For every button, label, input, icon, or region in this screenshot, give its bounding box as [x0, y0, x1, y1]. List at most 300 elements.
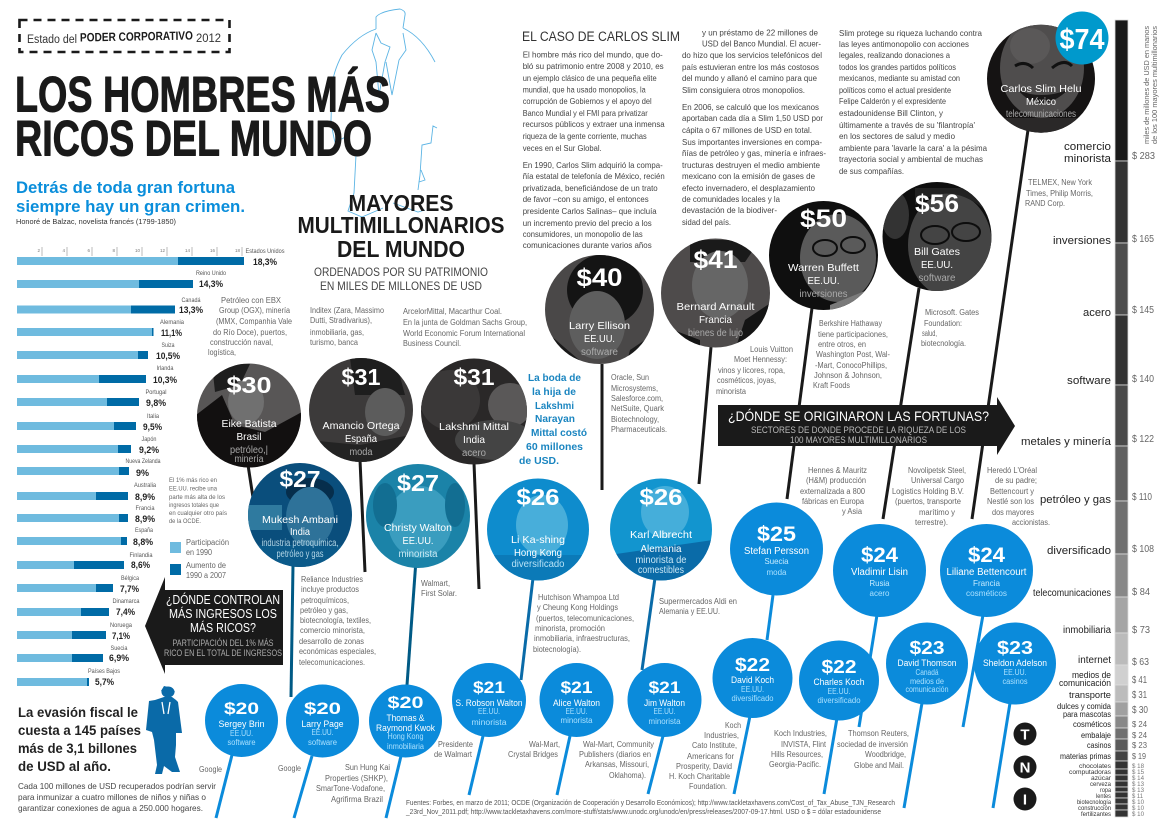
bar chart: share of top 1% in total income by country: Irlanda — [156, 366, 174, 372]
billionaire: Christy Walton: Christy Walton — [384, 522, 452, 534]
billionaire: Carlos Slim: Carlos Slim Helu — [1000, 83, 1082, 95]
billionaire: Lakshmi Mittal: $31 — [454, 364, 495, 390]
holdings: Arnault — [716, 345, 793, 396]
holdings: Kwok: Properties (SHKP), — [325, 774, 388, 783]
holdings: Charles Koch: INVISTA, Flint — [781, 740, 827, 749]
holdings: Gates — [921, 308, 979, 348]
quote: siempre hay un gran crimen. — [16, 197, 245, 216]
text block: the Carlos Slim case: legales, realizando donaciones a — [839, 50, 950, 60]
sector labels: diversificado — [1047, 545, 1111, 557]
holdings: Page: Google — [278, 764, 301, 773]
holdings: Jim Walton: Wal-Mart, Community — [583, 740, 654, 749]
holdings: Lisin: Universal Cargo — [911, 476, 965, 485]
sector values: $ 110 — [1132, 492, 1152, 503]
holdings: Persson: (H&M) producción — [806, 476, 866, 485]
holdings: Batista: Petróleo con EBX — [221, 296, 282, 305]
holdings: Mittal: ArcelorMittal, Macarthur Coal. — [403, 307, 502, 316]
billionaire: Alice Walton: EE.UU. — [566, 707, 588, 716]
billionaire: David Thomson: $23 — [910, 638, 944, 658]
quote — [16, 178, 245, 226]
holdings: Kwok — [316, 763, 390, 804]
bar chart: share of top 1% in total income by country: 13,3% — [179, 305, 203, 316]
billionaire: Sheldon Adelson: EE.UU. — [1004, 668, 1026, 677]
billionaire: Mukesh Ambani: India — [290, 526, 310, 538]
logo: TNI: I — [1023, 792, 1027, 808]
text block: the Carlos Slim case: estadounidense Bill Clinton, y — [839, 108, 944, 118]
holdings: Brin: Google — [199, 765, 222, 774]
holdings: Robson Walton: Presidente — [438, 740, 474, 749]
bar chart: share of top 1% in total income by country: 9% — [136, 468, 150, 479]
title: LOS HOMBRES MÁS — [15, 66, 390, 122]
text block: the Carlos Slim case: trayectoria social y ambiental de muchas — [839, 154, 983, 164]
billionaire: Stefan Persson: $25 — [757, 523, 796, 546]
holdings: Bettencourt: dos mayores — [992, 508, 1034, 517]
billionaire: Larry Page: $20 — [304, 699, 341, 718]
billionaire: Larry Page: software — [308, 738, 338, 747]
sector labels: inversiones — [1053, 235, 1112, 247]
bar chart: share of top 1% in total income by country: Dinamarca — [112, 599, 140, 605]
small sector labels — [1069, 764, 1112, 818]
holdings: Buffett: Kraft Foods — [813, 381, 850, 390]
billionaire: Alice Walton — [508, 663, 614, 795]
holdings: Li Ka-shing — [533, 593, 634, 654]
arrow callout: who controls the most income: MÁS INGRESOS LOS — [169, 606, 277, 621]
billionaire: Sergey Brin: EE.UU. — [230, 729, 253, 738]
callout: Lakshmi Mittal wedding: La boda de — [528, 372, 581, 384]
billionaire: David Koch: EE.UU. — [741, 685, 764, 694]
billionaire: Eike Batista: Eike Batista — [222, 418, 277, 430]
holdings: Arnault: cosméticos, joyas, — [717, 376, 776, 385]
billionaire: Christy Walton — [365, 463, 471, 685]
sector labels — [1021, 141, 1112, 761]
legend: Aumento de — [186, 561, 227, 570]
text block: the Carlos Slim case: políticos como el actual presidente — [839, 85, 951, 95]
billionaire: Bernard Arnault: bienes de lujo — [688, 328, 743, 339]
text block: the Carlos Slim case: de comunidades locales y la — [682, 194, 780, 204]
sector labels: para mascotas — [1063, 710, 1111, 719]
billionaire: Charles Koch: diversificado — [818, 696, 861, 705]
billionaire: David Thomson — [837, 622, 968, 808]
billionaire: Vladimir Lisin — [833, 466, 966, 727]
text block: the Carlos Slim case: El hombre más rico del mundo, que do- — [523, 49, 663, 59]
illustration: outline of a man in a suit — [331, 9, 437, 217]
callout: Lakshmi Mittal wedding: Narayan — [535, 413, 575, 425]
bar chart: share of top 1% in total income by country: 5,7% — [95, 677, 114, 688]
sector values: $ 140 — [1132, 374, 1154, 385]
holdings: Bettencourt: Heredó L'Oréal — [987, 466, 1037, 475]
sector labels: telecomunicaciones — [1033, 588, 1111, 599]
holdings: Kwok: SmarTone-Vodafone, — [316, 784, 385, 793]
text block: the Carlos Slim case: en los sectores de salud y medio — [839, 131, 955, 141]
billionaire: Stefan Persson — [730, 466, 867, 640]
bar chart: share of top 1% in total income by country: Alemania — [160, 320, 185, 326]
text block: the Carlos Slim case: En 1990, Carlos Slim adquirió la compa- — [523, 160, 663, 170]
sector labels: software — [1067, 375, 1111, 387]
holdings: Ortega: Inditex (Zara, Massimo — [310, 306, 384, 315]
quote: Honoré de Balzac, novelista francés (1799-1850) — [16, 219, 176, 226]
billionaire: David Koch — [669, 638, 792, 794]
sector values: $ 23 — [1132, 740, 1147, 750]
sector labels: metales y minería — [1021, 436, 1112, 448]
callout: Lakshmi Mittal wedding: Mittal costó — [531, 427, 587, 439]
text block: the Carlos Slim case: mexicano con la emisión de gases de — [682, 171, 815, 181]
heading: mayores multimillonarios del mundo: ORDENADOS POR SU PATRIMONIO — [314, 265, 488, 279]
text block: the Carlos Slim case: ñías de petróleo y gas, minería e infraes- — [682, 148, 826, 158]
billionaire: Warren Buffett: EE.UU. — [808, 275, 840, 287]
billionaire: Karl Albrecht: minorista de — [636, 555, 687, 566]
sector labels: embalaje — [1081, 731, 1112, 740]
bar chart: share of top 1% in total income by country: 10 — [135, 248, 140, 253]
holdings: Li Ka-shing: y Cheung Kong Holdings — [537, 603, 618, 612]
holdings: Batista: do Río Doce), puertos, — [213, 328, 287, 337]
billionaire: Karl Albrecht: comestibles — [638, 565, 684, 576]
logo: TNI: T — [1020, 726, 1030, 744]
bar chart: share of top 1% in total income by country: 8,6% — [131, 560, 150, 571]
holdings: Gates: Microsoft. Gates — [925, 308, 979, 317]
billionaire: Bill Gates: EE.UU. — [921, 259, 953, 271]
small sector values: $ 18 — [1132, 764, 1145, 770]
header tag: Estado del Poder Corporativo 2012: Estado del — [27, 34, 77, 46]
bar chart: share of top 1% in total income by country: Países Bajos — [88, 669, 120, 675]
billionaire: Vladimir Lisin: Rusia — [870, 578, 890, 588]
billionaire: Stefan Persson: moda — [766, 568, 787, 577]
text block: the Carlos Slim case: Sus importantes inversiones en compa- — [682, 137, 822, 147]
holdings: Ellison: Pharmaceuticals. — [611, 425, 667, 434]
sector labels: comunicación — [1059, 678, 1111, 688]
sector values: $ 24 — [1132, 730, 1147, 740]
holdings: Gates: salud, — [922, 329, 937, 338]
billionaire: Thomas and Raymond Kwok: Hong Kong — [388, 732, 424, 741]
holdings: Buffett: Washington Post, Wal- — [816, 350, 890, 359]
arrow callout: where fortunes originated: 100 MAYORES MULTIMILLONARIOS — [790, 435, 927, 446]
billionaire: Vladimir Lisin: Vladimir Lisin — [851, 567, 908, 578]
holdings: Buffett: Berkshire Hathaway — [819, 319, 882, 328]
bar chart: share of top 1% in total income by country: 8,8% — [133, 537, 154, 548]
heading: mayores multimillonarios del mundo: EN MILES DE MILLONES DE USD — [320, 279, 482, 293]
holdings: Bettencourt: Bettencourt y — [990, 487, 1034, 496]
billionaire: Bill Gates: software — [918, 273, 956, 284]
heading: mayores multimillonarios del mundo: DEL MUNDO — [337, 236, 465, 262]
holdings: Thomson — [837, 729, 909, 770]
bar chart: share of top 1% in total income by country: Australia — [134, 483, 157, 489]
billionaire: Liliane Bettencourt — [940, 466, 1050, 727]
bar chart: share of top 1% in total income by country: Finlandia — [130, 553, 153, 559]
holdings: Alice Walton: Wal-Mart, — [529, 740, 560, 749]
bar chart: share of top 1% in total income by country: 9,5% — [143, 422, 162, 433]
bar chart: share of top 1% in total income by country: Bélgica — [121, 576, 140, 582]
text block: the Carlos Slim case: corrupción de Gobiernos y el apoyo del — [523, 96, 652, 106]
text block: the Carlos Slim case: últimamente a través de su 'filantropía' — [839, 120, 975, 130]
billionaire: S. Robson Walton: S. Robson Walton — [456, 698, 522, 708]
sector labels: materias primas — [1060, 752, 1111, 761]
billionaire: Carlos Slim: telecomunicaciones — [1006, 109, 1076, 120]
billionaire: Bernard Arnault: Bernard Arnault — [676, 301, 755, 313]
holdings: Mittal: World Economic Forum International — [403, 329, 525, 338]
holdings: Charles Koch: Hills Resources, — [771, 750, 823, 759]
holdings: Ambani: petroquímicos, — [301, 596, 349, 605]
billionaire: Amancio Ortega: moda — [350, 447, 373, 458]
holdings: Bettencourt: Nestlé son los — [987, 497, 1034, 506]
axis caption: miles de millones de USD en manos — [1142, 26, 1151, 144]
sector values: $ 283 — [1132, 151, 1155, 162]
bar chart: share of top 1% in total income by country: 7,7% — [120, 584, 139, 595]
billionaire: Karl Albrecht: Karl Albrecht — [630, 529, 692, 541]
billionaire: Bill Gates: Bill Gates — [914, 246, 960, 258]
amount badge: $74 — [1060, 24, 1104, 56]
billionaire: Sheldon Adelson: $23 — [997, 638, 1033, 658]
holdings: Kwok: Agrifirma Brazil — [331, 795, 383, 804]
holdings: David Koch: Prosperity, David — [676, 762, 732, 771]
text block: the Carlos Slim case: tructuras destruyen el medio ambiente — [682, 160, 820, 170]
billionaire: David Koch: David Koch — [731, 675, 774, 685]
holdings: Ortega: inmobiliaria, gas, — [310, 328, 364, 337]
sector labels: transporte — [1069, 690, 1111, 701]
callout: Lakshmi Mittal wedding: Lakshmi — [535, 400, 574, 412]
billionaire: S. Robson Walton: minorista — [472, 718, 507, 727]
billionaire: Karl Albrecht: $26 — [640, 484, 682, 510]
bar chart: share of top 1% in total income by country: Francia — [136, 506, 155, 512]
holdings: Ambani: incluye productos — [301, 585, 359, 594]
bar chart: share of top 1% in total income by country: 11,1% — [161, 328, 182, 339]
holdings: David Koch — [669, 721, 741, 791]
billionaire: Li Ka-shing: Hong Kong — [514, 547, 562, 559]
axis caption — [1142, 26, 1159, 144]
sector labels: petróleo y gas — [1040, 494, 1112, 506]
billionaire: Larry Ellison: $40 — [576, 264, 622, 292]
small sector values: $ 10 — [1132, 812, 1145, 818]
billionaire: Jim Walton — [579, 663, 702, 794]
text block: the Carlos Slim case: cápita o 67 millones de USD en total. — [682, 125, 812, 135]
billionaire: Christy Walton: EE.UU. — [402, 535, 434, 547]
text block: the Carlos Slim case: Slim consiguiera otros monopolios. — [682, 85, 805, 95]
holdings: Ambani: petróleo y gas, — [300, 606, 348, 615]
holdings: Thomson: Thomson Reuters, — [848, 729, 909, 738]
holdings: Slim: Times, Philip Morris, — [1026, 189, 1093, 198]
sector values: $ 63 — [1132, 657, 1149, 668]
billionaire: Amancio Ortega — [308, 306, 415, 572]
billionaire: David Thomson: medios de — [910, 677, 944, 686]
holdings: Albrecht: Supermercados Aldi en — [659, 597, 737, 606]
billionaire: Lakshmi Mittal: acero — [462, 448, 486, 459]
callout: Lakshmi Mittal wedding — [519, 372, 587, 467]
holdings: David Koch: Cato Institute, — [692, 741, 737, 750]
small sector values: $ 10 — [1132, 806, 1145, 812]
billionaire: Larry Ellison — [544, 254, 667, 490]
holdings: Ortega: turismo, banca — [310, 338, 359, 347]
billionaire: Mukesh Ambani: industria petroquímica, — [262, 538, 338, 549]
text block: tax evasion — [18, 705, 216, 813]
bar chart: share of top 1% in total income by country: Italia — [147, 414, 160, 420]
billionaire: Sergey Brin: $20 — [224, 699, 259, 718]
text block: the Carlos Slim case: presidente Carlos Salinas– que incluía — [523, 206, 657, 216]
billionaire: Li Ka-shing: diversificado — [512, 559, 565, 570]
holdings: Batista: Group (OGX), minería — [219, 306, 290, 315]
callout: Lakshmi Mittal wedding: de USD. — [519, 455, 559, 467]
holdings: Charles Koch: Koch Industries, — [774, 729, 827, 738]
billionaire: David Thomson: David Thomson — [898, 658, 956, 668]
heading: mayores multimillonarios del mundo: MULTIMILLONARIOS — [298, 212, 504, 238]
sector labels: internet — [1078, 655, 1111, 666]
note: top 1% in USA: en cualquier otro país — [169, 510, 228, 517]
billionaire: Alice Walton: minorista — [560, 716, 593, 725]
text block: tax evasion: cuesta a 145 países — [18, 723, 141, 738]
bar chart: share of top 1% in total income by country: Suecia — [110, 646, 128, 652]
holdings: Slim — [1025, 178, 1093, 208]
small sector values: $ 15 — [1132, 770, 1145, 776]
billionaire: Karl Albrecht — [609, 478, 737, 670]
bar chart: share of top 1% in total income by country: Nueva Zelanda — [126, 459, 161, 465]
text block: the Carlos Slim case: un ejemplo clásico de una pequeña elite — [523, 73, 657, 83]
billionaire: Bill Gates — [881, 181, 992, 519]
holdings: Lisin — [892, 466, 966, 527]
callout: Lakshmi Mittal wedding: la hija de — [532, 386, 576, 398]
holdings: Ellison: Oracle, Sun — [611, 373, 649, 382]
holdings: Bettencourt: accionistas. — [1012, 518, 1050, 527]
billionaire: Sheldon Adelson: casinos — [1002, 677, 1028, 686]
small sector labels: azúcar — [1091, 776, 1111, 782]
holdings: Ambani: comercio minorista, — [300, 626, 365, 635]
holdings: Alice Walton — [508, 740, 560, 759]
legend: en 1990 — [186, 548, 212, 557]
holdings: Mittal — [403, 307, 527, 348]
text block: the Carlos Slim case: devastación de la biodiver- — [682, 205, 777, 215]
text block: the Carlos Slim case: En 2006, se calculó que los mexicanos — [682, 102, 819, 112]
billionaire: Charles Koch: $22 — [822, 657, 856, 677]
text block: the Carlos Slim case: do hizo que los servicios telefónicos del — [682, 50, 822, 60]
holdings: Thomson: Globe and Mail. — [854, 761, 904, 770]
legend: Participación — [186, 538, 229, 547]
bar chart: share of top 1% in total income by country: Suiza — [162, 343, 175, 349]
small sector labels: fertilizantes — [1081, 812, 1111, 818]
holdings: Batista: logística, — [208, 348, 236, 357]
billionaire: Sheldon Adelson — [974, 622, 1056, 808]
arrow callout: where fortunes originated: SECTORES DE DONDE PROCEDE LA RIQUEZA DE LOS — [751, 425, 966, 436]
text block: the Carlos Slim case: aportaban cada día a Slim 1,50 USD por — [682, 113, 823, 123]
sector labels: minorista — [1064, 153, 1112, 165]
holdings: Slim: TELMEX, New York — [1028, 178, 1093, 187]
text block: tax evasion: garantizar conexiones de agua a 250.000 hogares. — [18, 803, 203, 813]
holdings: Jim Walton: Arkansas, Missouri, — [585, 760, 649, 769]
holdings: Ellison: NetSuite, Quark — [611, 404, 665, 413]
holdings: Kwok: Sun Hung Kai — [345, 763, 390, 772]
note: top 1% in USA: de la OCDE. — [169, 518, 201, 525]
bar chart: share of top 1% in total income by country: 6 — [87, 248, 90, 253]
holdings: Persson: fábricas en Europa — [802, 497, 865, 506]
holdings: Albrecht: Alemania y EE.UU. — [659, 607, 720, 616]
header tag: Estado del Poder Corporativo 2012: 2012 — [196, 33, 221, 45]
bar chart: share of top 1% in total income by country: Japón — [142, 437, 156, 443]
billionaire: Bernard Arnault: $41 — [694, 246, 738, 274]
logo: TNI — [1014, 722, 1036, 810]
billionaire: Larry Page — [278, 684, 359, 818]
text block: the Carlos Slim case: Slim protege su riqueza luchando contra — [839, 28, 982, 38]
billionaire: Mukesh Ambani: petróleo y gas — [276, 549, 324, 560]
text block: the Carlos Slim case: privatizada, beneficiándose de un trato — [523, 183, 658, 193]
bar chart: share of top 1% in total income by country: 9,2% — [139, 445, 160, 456]
billionaire: Li Ka-shing: Li Ka-shing — [511, 534, 565, 546]
billionaire: Liliane Bettencourt: Francia — [973, 578, 1000, 588]
holdings: Persson: Hennes & Mauritz — [808, 466, 867, 475]
heading: mayores multimillonarios del mundo — [298, 190, 504, 293]
holdings: Slim: RAND Corp. — [1025, 199, 1065, 208]
holdings: Buffett — [813, 319, 890, 390]
text block: the Carlos Slim case: las leyes antimonopolio con acciones — [839, 39, 969, 49]
sector labels: dulces y comida — [1057, 702, 1112, 711]
billionaire: Warren Buffett: inversiones — [800, 289, 848, 300]
text block: the Carlos Slim case: un incremento previo del precio a los — [523, 218, 652, 228]
holdings: Li Ka-shing: (puertos, telecomunicaciones, — [536, 614, 634, 623]
callout: Lakshmi Mittal wedding: 60 millones — [526, 441, 583, 453]
legend — [170, 538, 229, 580]
note: top 1% in USA: ingresos totales que — [169, 502, 219, 509]
text block: the Carlos Slim case: y un préstamo de 22 millones de — [702, 28, 818, 38]
bar chart: share of top 1% in total income by country: Noruega — [110, 623, 133, 629]
holdings: Batista — [208, 296, 292, 357]
holdings: Ortega: Dutti, Stradivarius), — [310, 316, 372, 325]
text block: the Carlos Slim case: Felipe Calderón y el expresidente — [839, 96, 946, 106]
billionaire: Liliane Bettencourt: cosméticos — [966, 589, 1007, 598]
text block: the Carlos Slim case: USD del Banco Mundial. El acuer- — [702, 39, 821, 49]
holdings: Ambani: Reliance Industries — [301, 575, 363, 584]
small sector labels: ropa — [1100, 788, 1112, 794]
billionaire: Thomas and Raymond Kwok: inmobiliaria — [387, 742, 424, 751]
header tag: Estado del Poder Corporativo 2012: PODER CORPORATIVO — [80, 29, 193, 44]
billionaire: Li Ka-shing: $26 — [516, 484, 560, 510]
holdings: Arnault: Louis Vuitton — [750, 345, 793, 354]
billionaire: Jim Walton: minorista — [648, 717, 681, 726]
text block: the Carlos Slim case: mundial, que ha usado monopolios, la — [523, 85, 646, 95]
holdings: Ambani: económicas especiales, — [299, 647, 376, 656]
billionaire: Vladimir Lisin: $24 — [861, 544, 898, 567]
holdings: Lisin: Logistics Holding B.V. — [892, 487, 964, 496]
billionaire: Alice Walton: $21 — [560, 678, 592, 697]
billionaire: Mukesh Ambani: $27 — [280, 466, 320, 492]
holdings: Ellison — [611, 373, 667, 434]
bar chart: share of top 1% in total income by country: 16 — [210, 248, 215, 253]
bar chart: share of top 1% in total income by country: 7,4% — [116, 607, 135, 618]
sector values: $ 19 — [1132, 751, 1146, 761]
holdings: Li Ka-shing: minorista, promoción — [535, 624, 605, 633]
billionaire: Larry Ellison: software — [581, 347, 618, 358]
billionaire: Larry Ellison: Larry Ellison — [569, 320, 630, 332]
holdings: Lisin: (puertos, transporte — [895, 497, 962, 506]
text block: the Carlos Slim case: efecto invernadero, el desplazamiento — [682, 183, 815, 193]
small sector values: $ 10 — [1132, 800, 1145, 806]
sector labels: acero — [1083, 307, 1111, 319]
sector values: $ 108 — [1132, 544, 1154, 555]
holdings: Ellison: Salesforce.com, — [611, 394, 663, 403]
arrow callout: where fortunes originated: ¿DÓNDE SE ORIGINARON LAS FORTUNAS? — [728, 408, 989, 424]
billionaire: Bernard Arnault — [660, 238, 793, 484]
holdings: Ambani: telecomunicaciones. — [299, 658, 365, 667]
holdings: Li Ka-shing: Hutchison Whampoa Ltd — [538, 593, 619, 602]
bar chart: share of top 1% in total income by country: Portugal — [146, 390, 166, 396]
holdings: Batista: (MMX, Companhia Vale — [216, 317, 292, 326]
bar chart: share of top 1% in total income by country: 10,5% — [156, 351, 180, 362]
billionaire: Amancio Ortega: España — [345, 433, 377, 445]
holdings: Robson Walton — [434, 740, 474, 759]
billionaire: Liliane Bettencourt: $24 — [968, 544, 1005, 567]
text block: the Carlos Slim case: comunicaciones durante varios años — [523, 240, 652, 250]
bar chart: share of top 1% in total income by country: España — [135, 528, 154, 534]
billionaire: David Koch: $22 — [735, 655, 770, 675]
holdings: Charles Koch: Georgia-Pacific. — [769, 760, 821, 769]
axis caption: de los 100 mayores multimillonarios — [1150, 26, 1159, 144]
holdings: Alice Walton: Crystal Bridges — [508, 750, 558, 759]
sector labels: comercio — [1064, 141, 1111, 153]
text block: tax evasion: Cada 100 millones de USD recuperados podrían servir — [18, 781, 216, 791]
billionaire: S. Robson Walton: $21 — [473, 678, 505, 697]
